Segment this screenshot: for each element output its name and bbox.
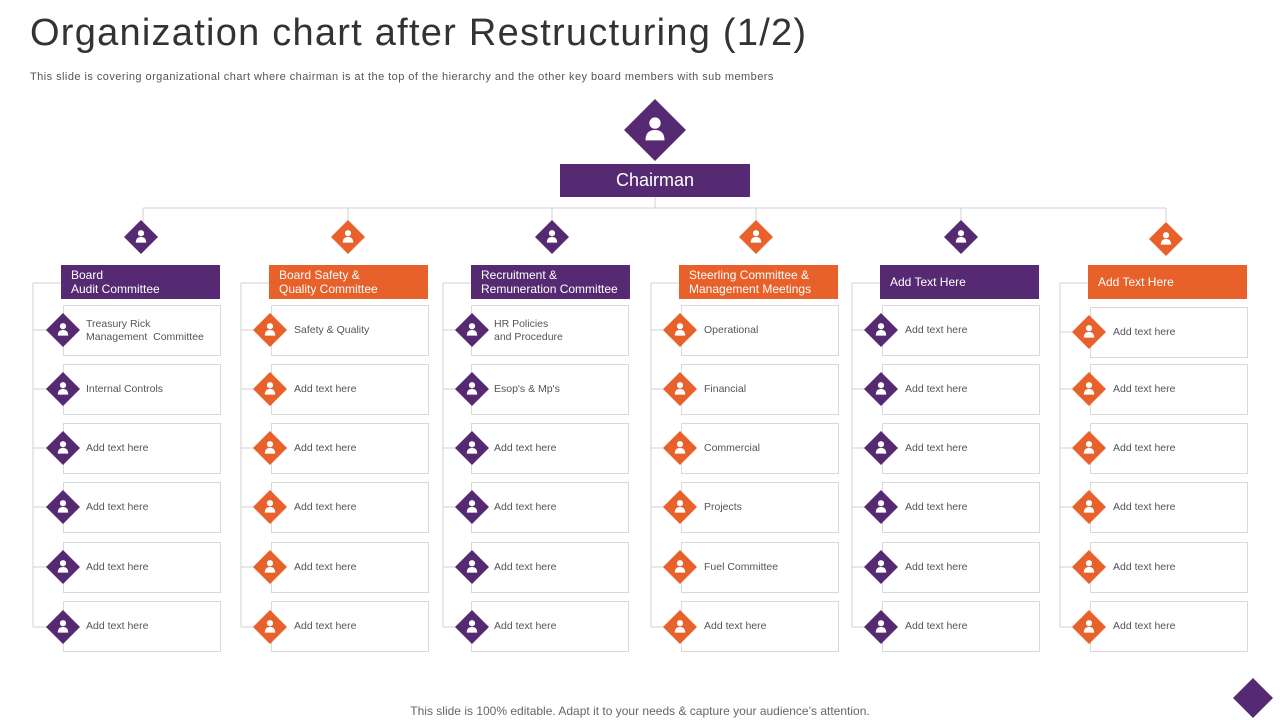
column 1: Add text here [86,561,148,573]
column 5: Add text here [905,501,967,513]
column 3: and Procedure [494,330,563,342]
column 4: Add text here [704,620,766,632]
column 5: Add text here [905,561,967,573]
column 3: HR Policies [494,318,548,330]
column 6: Add text here [1113,620,1175,632]
column 2: Add text here [294,620,356,632]
column 6: Add text here [1113,326,1175,338]
column 4: Operational [704,324,758,336]
icon: column 6 diamond [1149,222,1183,256]
column 5: Add text here [905,442,967,454]
icon: column 3 diamond [535,220,569,254]
icon: chairman diamond [624,99,686,161]
column 6: Add text here [1113,442,1175,454]
column 4: Financial [704,383,746,395]
column 2: Add text here [294,383,356,395]
header: add text 6: Add Text Here [1098,275,1174,289]
header: board safety [269,265,428,299]
column 3: Esop's & Mp's [494,383,560,395]
column 4 [663,220,839,652]
column 3 [455,220,630,652]
subtitle: This slide is covering organizational chart where chairman is at the top of the hierarchy and the other key board members with sub members [30,71,774,83]
column 1: Add text here [86,501,148,513]
column 2: Add text here [294,442,356,454]
header: steerling [679,265,838,299]
column 3: Add text here [494,501,556,513]
column 6: Add text here [1113,383,1175,395]
column 3: Add text here [494,620,556,632]
header: board audit: Audit Committee [71,282,160,296]
column 4: Projects [704,501,742,513]
column 5: Add text here [905,620,967,632]
header: add text 5: Add Text Here [890,275,966,289]
icon: column 5 diamond [944,220,978,254]
column 1: Treasury Rick [86,318,150,330]
header: add text 6 [1088,265,1247,299]
column 1: Add text here [86,442,148,454]
footer note: This slide is 100% editable. Adapt it to your needs & capture your audience’s attention. [410,704,870,718]
icon: column 2 diamond [331,220,365,254]
column 5: Add text here [905,324,967,336]
title: Organization chart after Restructuring (1/2) [30,12,807,54]
column 6: Add text here [1113,501,1175,513]
header: add text 5 [880,265,1039,299]
header: recruitment: Remuneration Committee [481,282,618,296]
column 6: Add text here [1113,561,1175,573]
icon: column 4 diamond [739,220,773,254]
header: board safety: Board Safety & [279,268,360,282]
column 1: Management Committee [86,330,204,342]
column 5 [864,220,1040,652]
chairman box: Chairman [616,170,694,190]
icon: corner diamond [1233,678,1273,718]
column 3: Add text here [494,442,556,454]
column 2: Add text here [294,501,356,513]
icon: column 1 diamond [124,220,158,254]
header: board safety: Quality Committee [279,282,378,296]
column 1 [46,220,221,652]
chairman box [560,164,750,197]
column 5: Add text here [905,383,967,395]
column 4: Commercial [704,442,760,454]
column 1: Add text here [86,620,148,632]
column 2: Add text here [294,561,356,573]
column 2 [253,220,429,652]
header: board audit: Board [71,268,103,282]
column 6 [1072,222,1248,652]
header: recruitment: Recruitment & [481,268,557,282]
header: recruitment [471,265,630,299]
column 2: Safety & Quality [294,324,369,336]
header: steerling: Steerling Committee & [689,268,809,282]
header: board audit [61,265,220,299]
column 4: Fuel Committee [704,561,778,573]
column 3: Add text here [494,561,556,573]
header: steerling: Management Meetings [689,282,811,296]
column 1: Internal Controls [86,383,163,395]
